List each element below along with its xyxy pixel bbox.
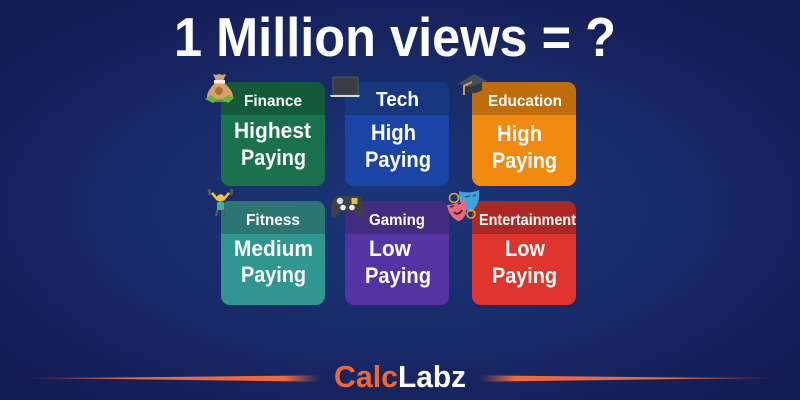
text: highest paying: Paying	[241, 145, 306, 170]
heading: fitness: Fitness	[246, 212, 300, 229]
text: low paying: Low	[369, 236, 412, 261]
text: low paying: Paying	[365, 263, 431, 288]
text: medium paying: Paying	[241, 262, 306, 287]
panel: finance	[221, 82, 325, 186]
text: high paying: High	[371, 120, 416, 145]
panel: tech	[345, 82, 449, 186]
logo: Calc	[334, 359, 398, 394]
text: high paying: High	[497, 121, 542, 146]
icon: laptop	[330, 77, 360, 97]
icon: money bag	[205, 74, 234, 103]
text: highest paying: Highest	[234, 118, 312, 143]
text: highest paying	[234, 118, 312, 170]
heading: education: Education	[488, 93, 562, 110]
text: low paying	[365, 236, 431, 288]
text: high paying: Paying	[365, 147, 431, 172]
text: low paying	[492, 236, 557, 288]
icon: weightlifter	[209, 189, 232, 216]
title: 1 Million views = ?	[174, 6, 616, 68]
panel: entertainment	[472, 201, 577, 305]
decorative line: left	[24, 376, 320, 382]
icon: game controller	[331, 196, 364, 217]
heading: gaming: Gaming	[369, 212, 425, 229]
text: high paying	[492, 121, 557, 173]
text: low paying: Low	[505, 236, 546, 261]
heading: tech: Tech	[376, 89, 419, 111]
text: medium paying: Medium	[234, 236, 313, 261]
panel: education	[472, 82, 576, 186]
text: medium paying	[234, 236, 313, 287]
text: low paying: Paying	[492, 263, 557, 288]
panel: gaming	[345, 201, 449, 305]
icon: theatre masks	[447, 190, 479, 221]
icon: graduation cap	[458, 74, 487, 95]
decorative line: right	[480, 376, 776, 382]
text: high paying	[365, 120, 431, 172]
heading: entertainment: Entertainment	[479, 212, 577, 229]
heading: finance: Finance	[244, 93, 302, 110]
text: high paying: Paying	[492, 148, 557, 173]
panel: fitness	[221, 201, 325, 305]
logo: Labz	[398, 359, 466, 394]
logo	[334, 359, 466, 394]
